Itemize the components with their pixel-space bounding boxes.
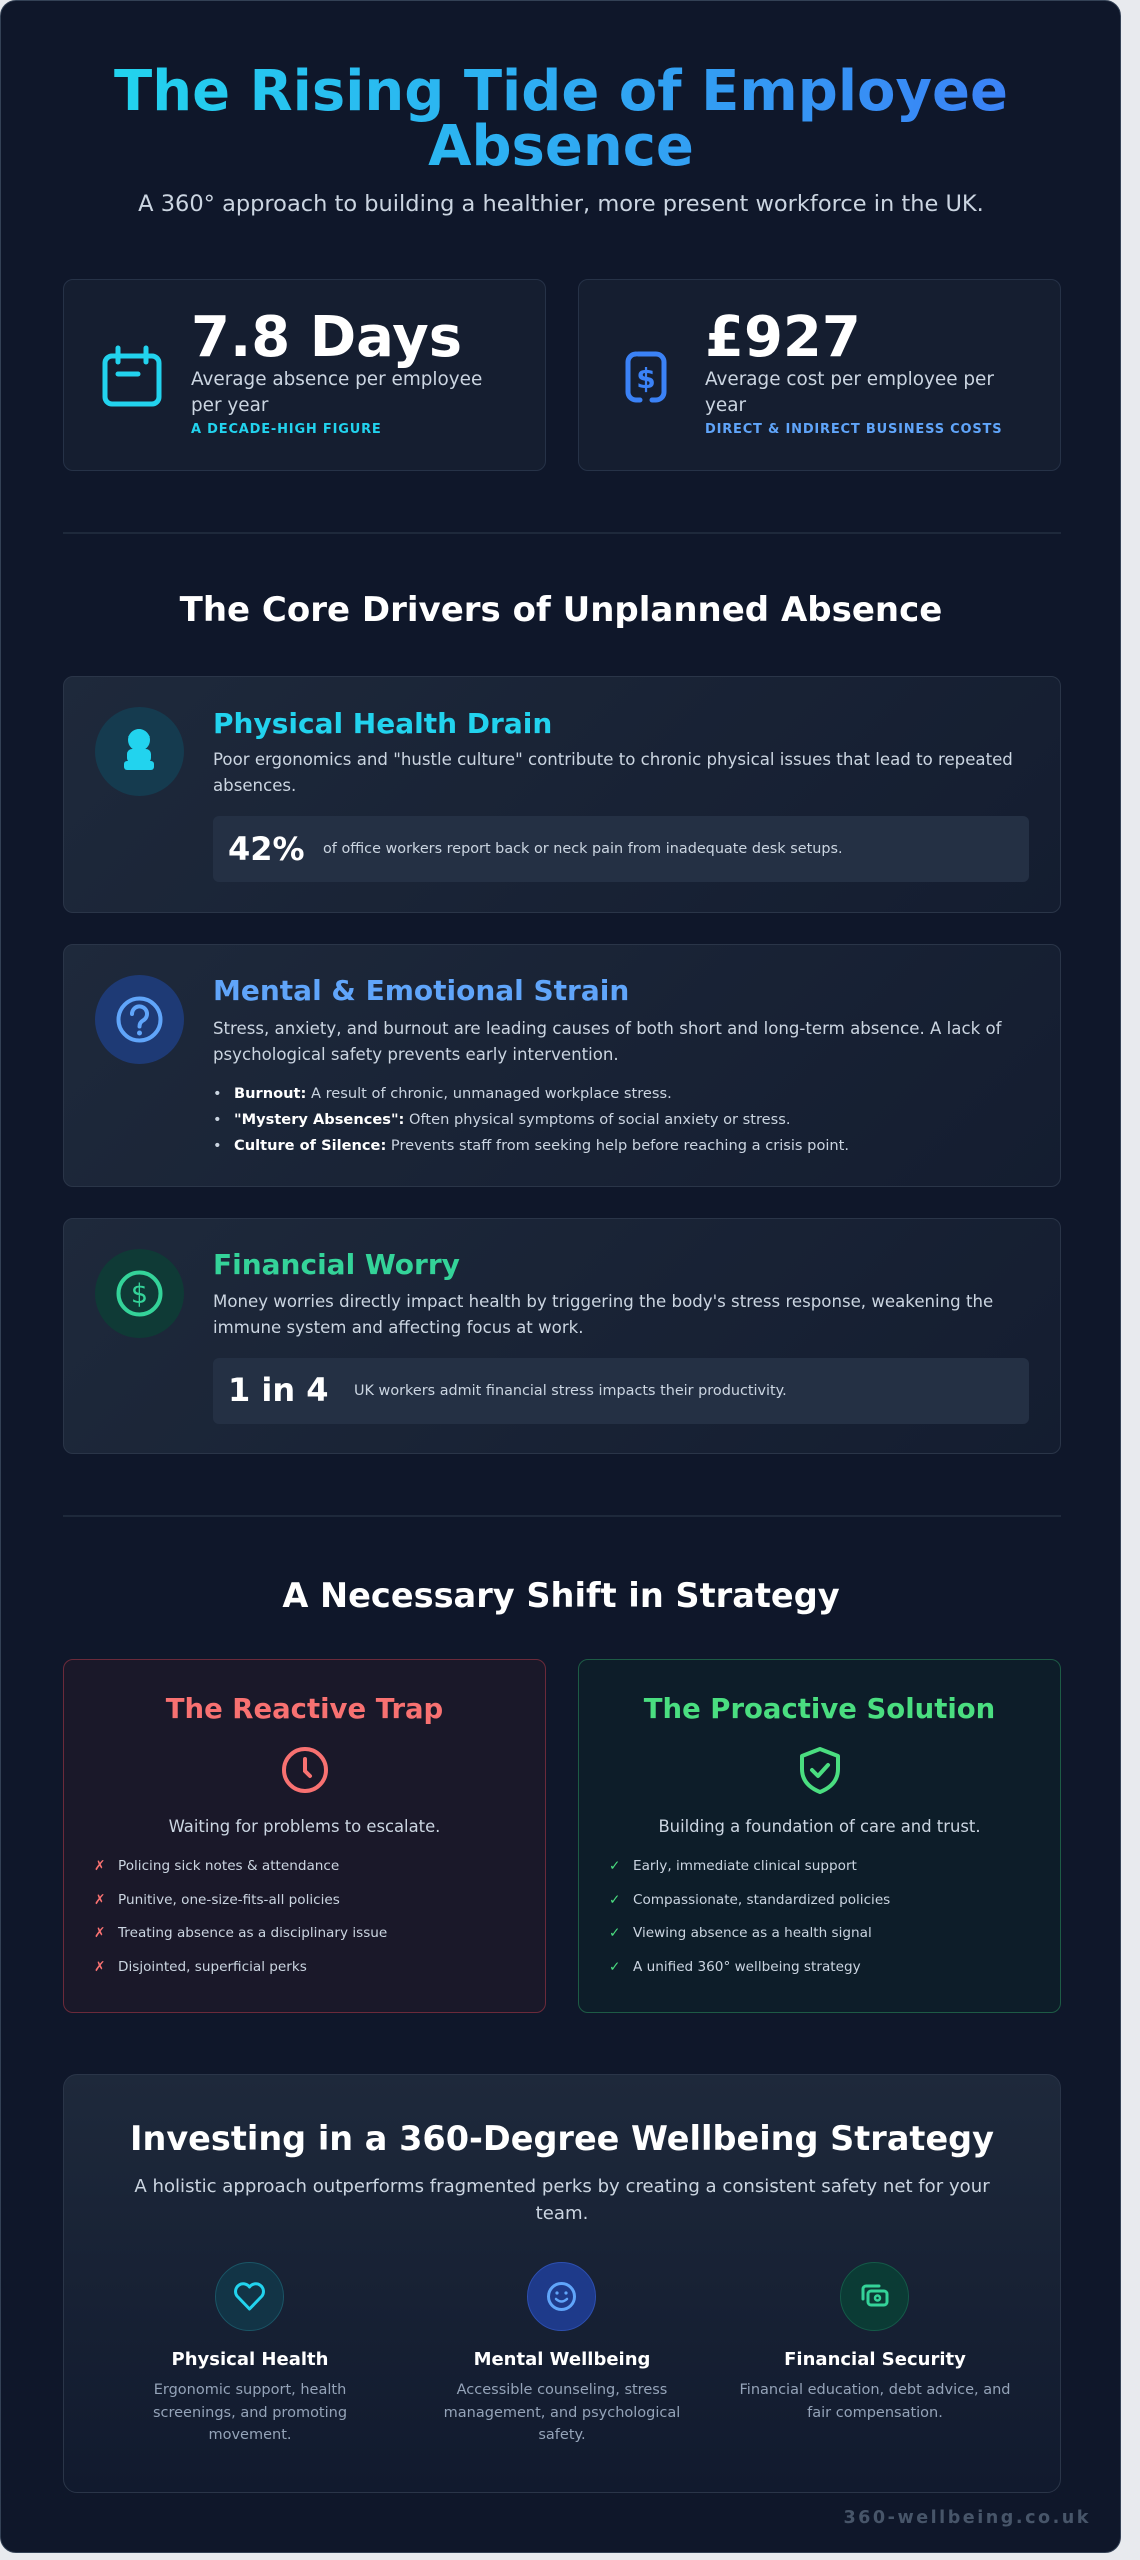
list: Punitive, one-size-fits-all policies	[118, 1892, 340, 1908]
list: A unified 360° wellbeing strategy	[633, 1959, 861, 1975]
number: £927	[705, 305, 861, 370]
pillar: mental: Accessible counseling, stress	[457, 2382, 667, 2398]
list: ✗	[94, 1858, 105, 1874]
body: psychological safety prevents early intervention.	[213, 1045, 619, 1064]
stat callout: UK workers admit financial stress impacts their productivity.	[354, 1383, 787, 1399]
bullet list: "Mystery Absences": Often physical symptoms of social anxiety or stress.	[234, 1111, 790, 1128]
body: Poor ergonomics and "hustle culture" contribute to chronic physical issues that lead to repeated	[213, 750, 1013, 769]
description: Average cost per employee per	[705, 369, 994, 390]
list: ✗	[94, 1892, 105, 1908]
heading: Investing in a 360-Degree Wellbeing Strategy	[130, 2119, 994, 2158]
body: Stress, anxiety, and burnout are leading causes of both short and long-term absence. A lack of	[213, 1019, 1001, 1038]
list: ✗	[94, 1959, 105, 1975]
stat callout	[213, 816, 1029, 882]
bullet list: •	[213, 1085, 222, 1102]
subtitle: team.	[536, 2203, 588, 2224]
list: Early, immediate clinical support	[633, 1858, 857, 1874]
body: absences.	[213, 776, 296, 795]
section heading: drivers: The Core Drivers of Unplanned Absence	[180, 590, 942, 630]
icon: dollar circle	[95, 1249, 184, 1338]
list: Compassionate, standardized policies	[633, 1892, 890, 1908]
icon: money	[626, 352, 666, 402]
stat card: days	[63, 279, 546, 471]
bullet list: •	[213, 1111, 222, 1128]
body	[213, 1019, 1002, 1064]
description: Average absence per employee	[191, 369, 482, 390]
title: The Rising Tide of Employee	[114, 59, 1008, 124]
bullet list: Burnout: A result of chronic, unmanaged workplace stress.	[234, 1085, 672, 1102]
pillar: mental: safety.	[538, 2427, 586, 2443]
panel: financial worry	[63, 1218, 1061, 1454]
tag: A DECADE-HIGH FIGURE	[191, 422, 382, 437]
pillar: mental: management, and psychological	[444, 2404, 680, 2420]
panel: mental strain	[63, 944, 1061, 1187]
pillar: physical: Physical Health	[172, 2349, 328, 2370]
bullet list: •	[213, 1137, 222, 1154]
body: Money worries directly impact health by triggering the body's stress response, weakening the	[213, 1292, 993, 1311]
heading: The Reactive Trap	[166, 1693, 443, 1725]
list	[609, 1858, 890, 1975]
body	[213, 1292, 993, 1337]
subtitle: A 360° approach to building a healthier, more present workforce in the UK.	[138, 191, 984, 217]
list: ✓	[609, 1892, 620, 1908]
panel: physical health drain	[63, 676, 1061, 913]
pillar: financial: Financial education, debt advice, and	[740, 2382, 1010, 2398]
footer: 360-wellbeing.co.uk	[843, 2508, 1091, 2528]
list: ✓	[609, 1858, 620, 1874]
description: year	[705, 395, 746, 416]
pillar: mental: Mental Wellbeing	[474, 2349, 650, 2370]
body: immune system and affecting focus at work.	[213, 1318, 584, 1337]
pillar: mental	[444, 2262, 680, 2443]
stat callout: 1 in 4	[228, 1371, 329, 1409]
heading: Financial Worry	[213, 1248, 460, 1281]
title	[1, 64, 1121, 174]
bullet list	[213, 1085, 849, 1154]
icon: clock	[282, 1747, 328, 1793]
list: Viewing absence as a health signal	[633, 1925, 872, 1941]
icon: shield check	[800, 1747, 840, 1794]
panel: 360 strategy	[63, 2074, 1061, 2493]
subtitle: Building a foundation of care and trust.	[658, 1817, 981, 1836]
list: ✗	[94, 1925, 105, 1941]
body	[213, 750, 1013, 795]
list: Policing sick notes & attendance	[118, 1858, 339, 1874]
icon: heart	[215, 2262, 284, 2331]
description	[705, 369, 994, 416]
icon: money: $	[636, 362, 656, 395]
list: ✓	[609, 1925, 620, 1941]
heading: Mental & Emotional Strain	[213, 974, 629, 1007]
description	[191, 369, 482, 416]
stat card: cost	[578, 279, 1061, 471]
pillar: physical	[153, 2262, 347, 2443]
stat callout	[213, 1358, 1029, 1424]
icon: dollar circle: $	[131, 1279, 148, 1310]
pillar: physical: movement.	[208, 2427, 292, 2443]
panel: proactive solution	[578, 1659, 1061, 2013]
subtitle: Waiting for problems to escalate.	[169, 1817, 440, 1836]
pillar: financial: Financial Security	[784, 2349, 966, 2370]
number: 7.8 Days	[191, 305, 462, 370]
stat callout: of office workers report back or neck pain from inadequate desk setups.	[323, 841, 843, 857]
subtitle: A holistic approach outperforms fragmented perks by creating a consistent safety net for your	[134, 2176, 990, 2197]
subtitle	[134, 2176, 990, 2224]
icon: person	[95, 707, 184, 796]
icon: question	[95, 975, 184, 1064]
pillar: financial	[740, 2262, 1010, 2420]
description: per year	[191, 395, 268, 416]
stat callout: 42%	[228, 830, 305, 868]
heading: Physical Health Drain	[213, 707, 552, 740]
pillar: physical: screenings, and promoting	[153, 2404, 347, 2420]
icon: cash	[840, 2262, 909, 2331]
list	[94, 1858, 387, 1975]
tag: DIRECT & INDIRECT BUSINESS COSTS	[705, 422, 1002, 437]
heading: The Proactive Solution	[644, 1693, 995, 1725]
pillar: financial: fair compensation.	[807, 2404, 943, 2420]
icon: calendar	[102, 346, 162, 406]
panel: reactive trap	[63, 1659, 546, 2013]
pillar: physical: Ergonomic support, health	[154, 2382, 346, 2398]
list: Treating absence as a disciplinary issue	[118, 1925, 387, 1941]
icon: smile	[527, 2262, 596, 2331]
section heading: strategy: A Necessary Shift in Strategy	[282, 1576, 840, 1615]
list: ✓	[609, 1959, 620, 1975]
list: Disjointed, superficial perks	[118, 1959, 307, 1975]
bullet list: Culture of Silence: Prevents staff from seeking help before reaching a crisis point.	[234, 1137, 849, 1154]
title: Absence	[428, 114, 694, 179]
